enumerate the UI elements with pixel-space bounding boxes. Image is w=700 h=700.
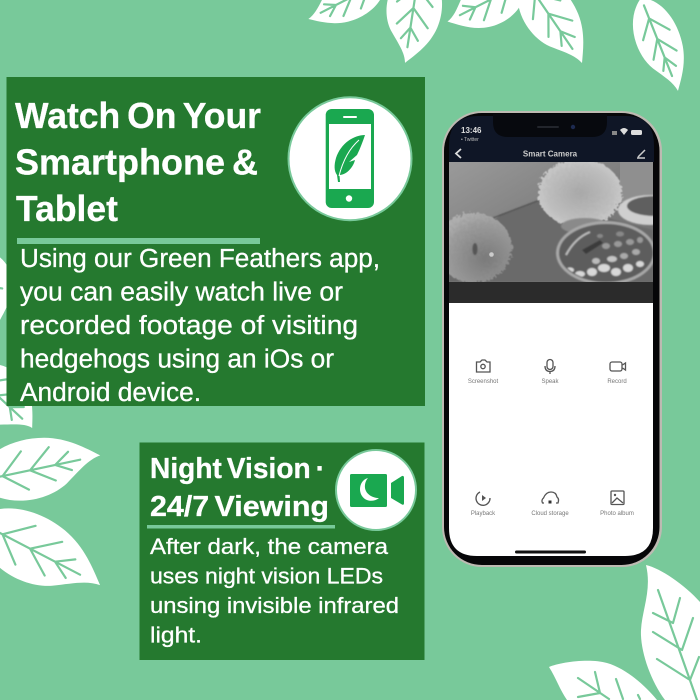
smartphone mockup bbox=[442, 111, 662, 567]
text block: app description: Android device. bbox=[20, 379, 201, 407]
text block: app description bbox=[20, 245, 380, 407]
control: photo album: Photo album bbox=[600, 511, 634, 517]
decorative leaves: bottom right bbox=[549, 565, 700, 700]
app header bbox=[449, 114, 654, 162]
heading underline bbox=[147, 525, 335, 528]
home indicator bbox=[515, 550, 586, 554]
control panel bbox=[449, 303, 653, 556]
text block: app description: hedgehogs using an iOs or bbox=[20, 346, 335, 374]
text block: app description: Using our Green Feathers app, bbox=[20, 245, 380, 273]
decorative leaves: top edge bbox=[299, 0, 699, 99]
control: speak: Speak bbox=[541, 379, 560, 385]
control: record: Record bbox=[607, 379, 627, 385]
text block: app description: recorded footage of visiting bbox=[20, 312, 358, 340]
heading: watch on your smartphone and tablet bbox=[15, 95, 261, 229]
control: screenshot: Screenshot bbox=[468, 379, 499, 385]
heading: watch on your smartphone and tablet: Watch On Your bbox=[15, 95, 261, 136]
control: photo album bbox=[600, 491, 634, 517]
control: speak bbox=[541, 360, 560, 385]
app header: • Twitter bbox=[461, 137, 479, 143]
control: playback: Playback bbox=[471, 511, 496, 517]
app header: 13:46 bbox=[461, 126, 482, 135]
icon: video camera with moon bbox=[336, 450, 416, 530]
control: cloud storage bbox=[531, 492, 569, 517]
heading: watch on your smartphone and tablet: Tablet bbox=[16, 188, 118, 229]
decorative leaves: left edge bbox=[0, 235, 116, 614]
text block: night vision description bbox=[150, 534, 399, 648]
app header: Smart Camera bbox=[523, 150, 578, 158]
control: screenshot bbox=[468, 360, 499, 385]
icon: smartphone with feather bbox=[288, 97, 412, 220]
control: record bbox=[607, 362, 627, 385]
control: playback bbox=[471, 492, 496, 517]
heading: night vision 24/7 viewing: 24/7 Viewing bbox=[150, 491, 329, 523]
camera photo: hedgehogs at food bowl bbox=[449, 162, 653, 282]
dark band under the video bbox=[449, 282, 653, 303]
text block: app description: you can easily watch live or bbox=[20, 278, 344, 306]
panel: night vision and 24/7 viewing bbox=[140, 442, 424, 660]
phone frame bbox=[442, 111, 662, 567]
panel: watch on your smartphone and tablet bbox=[6, 77, 425, 407]
text block: night vision description: After dark, the camera bbox=[150, 534, 389, 559]
text block: night vision description: light. bbox=[150, 622, 202, 648]
heading: watch on your smartphone and tablet: Smartphone & bbox=[15, 142, 258, 182]
front food bowl bbox=[556, 221, 656, 285]
text block: night vision description: uses night vision LEDs bbox=[150, 564, 383, 588]
heading underline bbox=[17, 238, 260, 244]
control: cloud storage: Cloud storage bbox=[531, 511, 569, 517]
heading: night vision 24/7 viewing bbox=[150, 453, 329, 523]
text block: night vision description: unsing invisible infrared bbox=[150, 593, 399, 618]
back bowl bbox=[617, 194, 653, 226]
heading: night vision 24/7 viewing: Night Vision · bbox=[150, 453, 325, 485]
